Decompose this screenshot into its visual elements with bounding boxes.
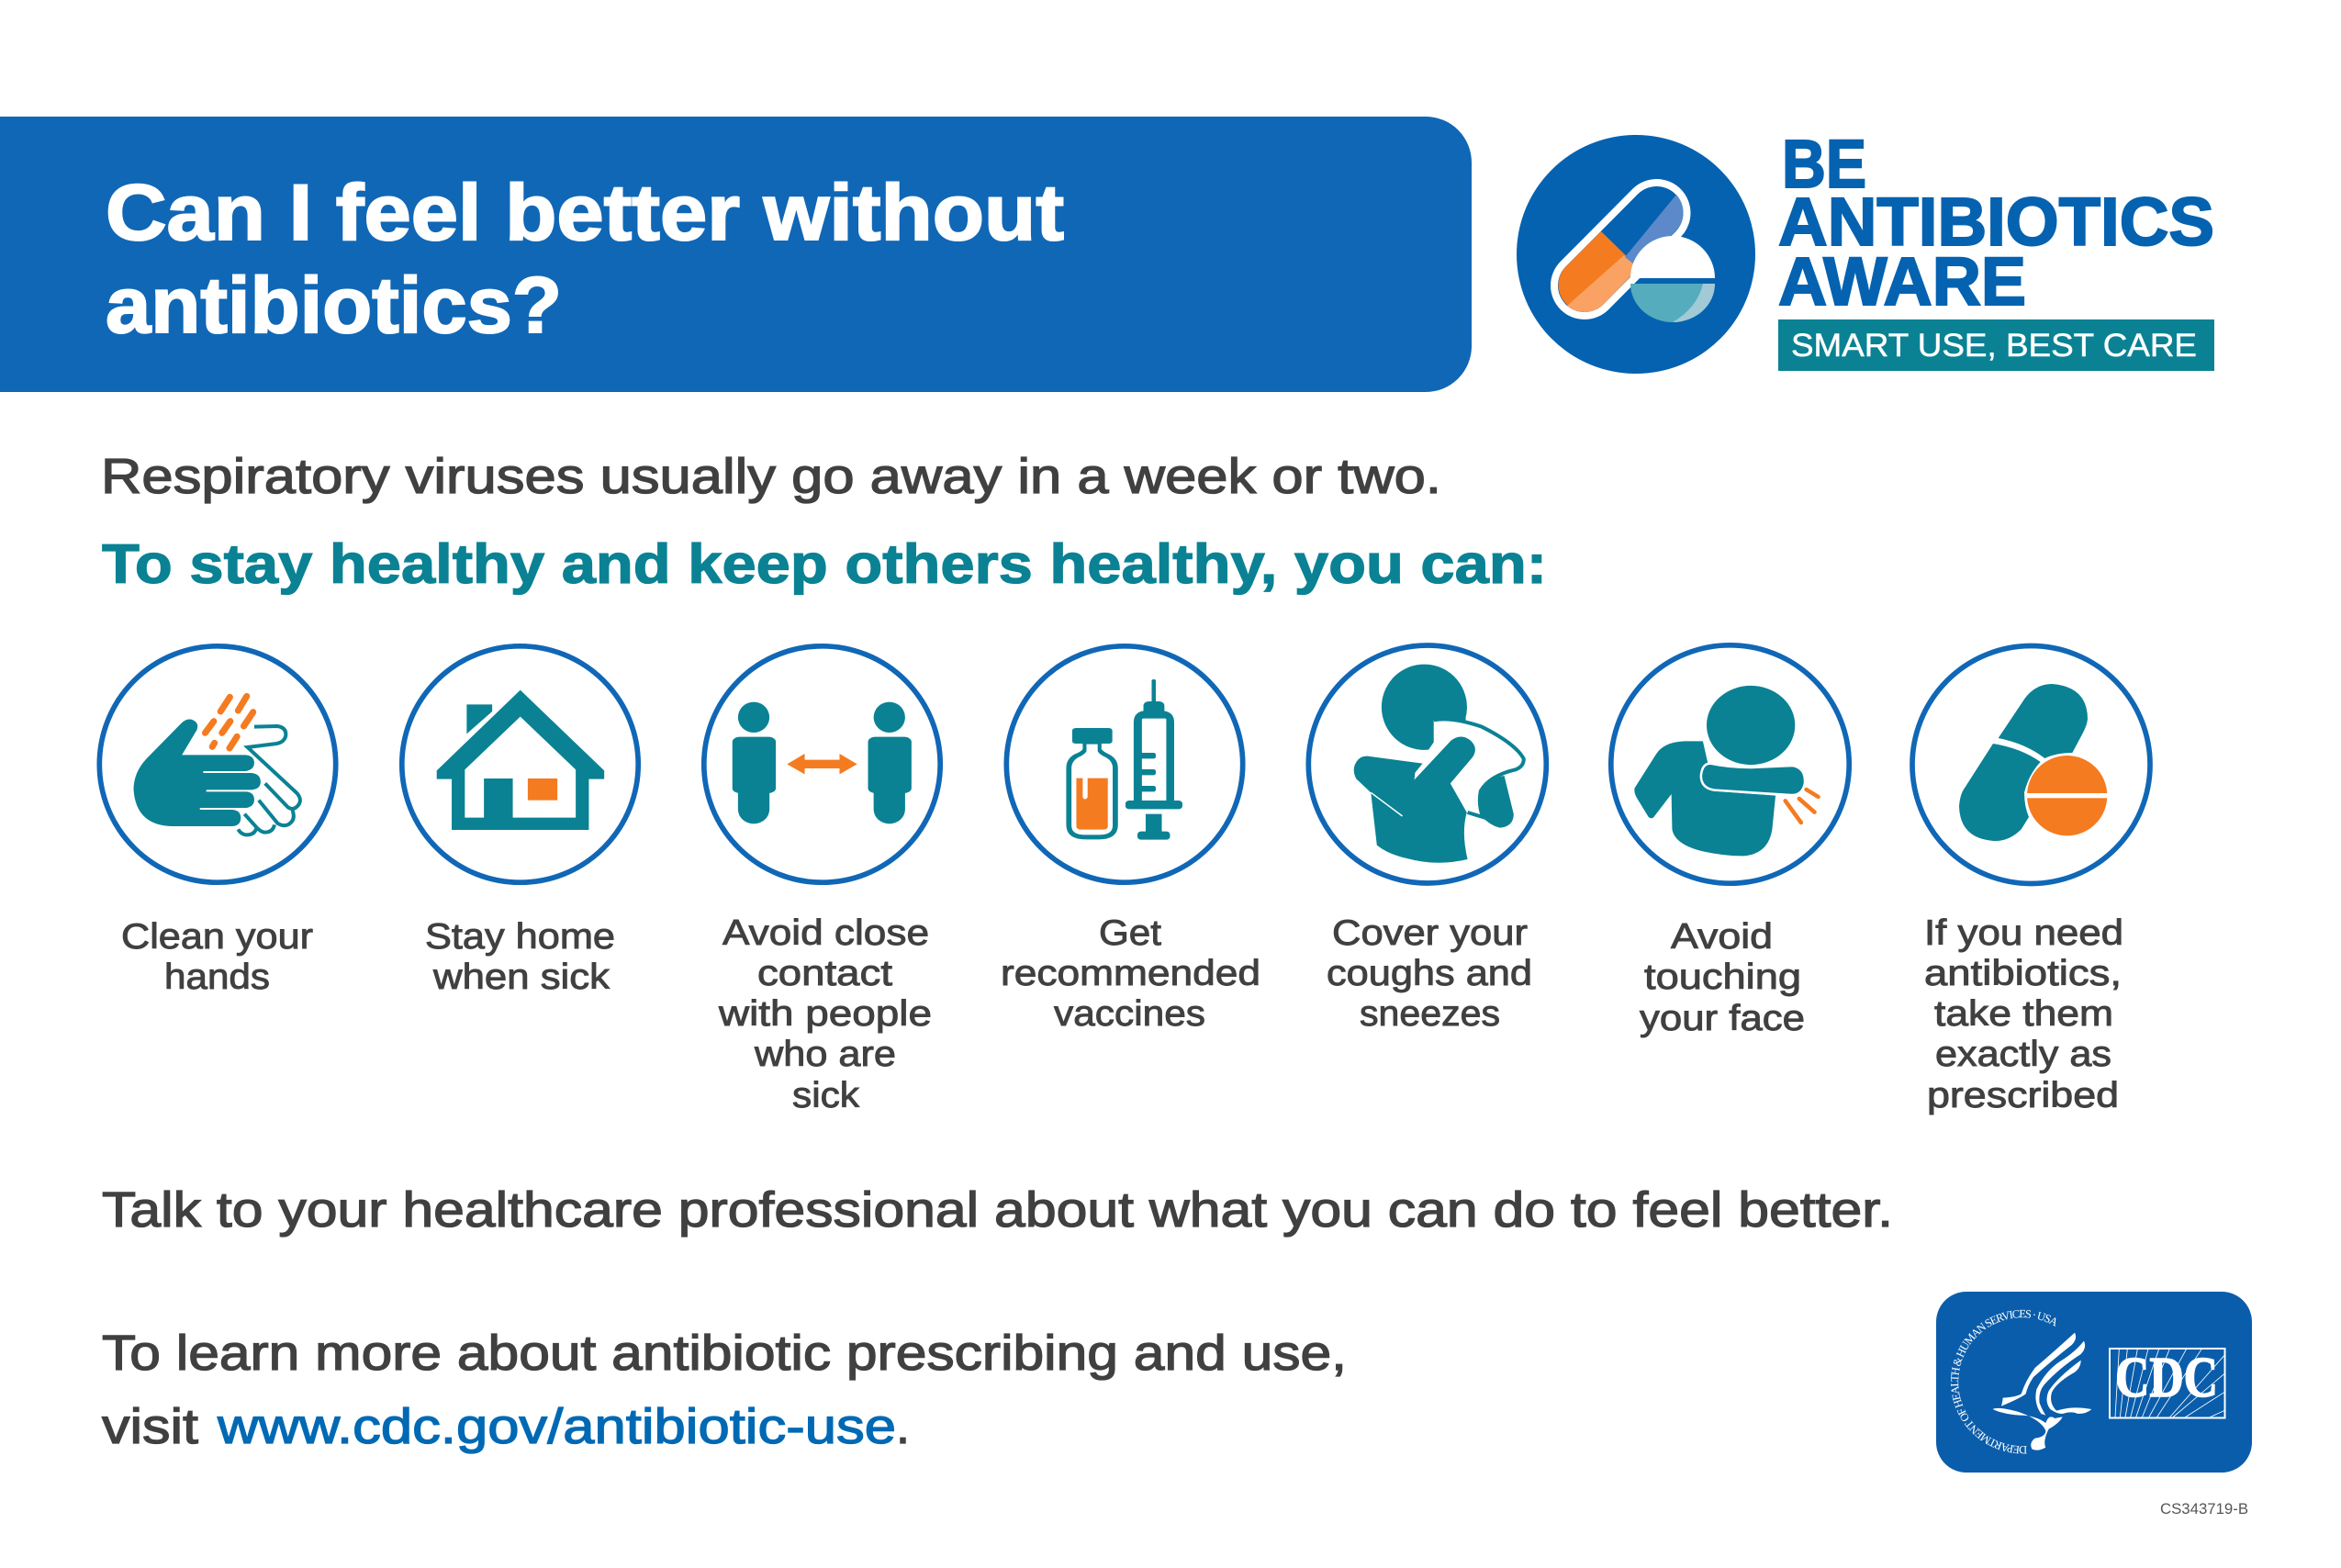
label: stay home: [425, 917, 615, 997]
label: vaccines: [1001, 913, 1260, 1034]
label: avoid touching face: Avoid: [1671, 917, 1773, 957]
label: clean your hands: hands: [164, 958, 270, 997]
icon: cover coughs and sneezes: [1308, 645, 1546, 883]
icon: take antibiotics as prescribed: [1912, 646, 2150, 883]
label: vaccines: recommended: [1001, 954, 1260, 993]
icon: avoid touching your face: [1611, 645, 1849, 883]
logo: Be Antibiotics Aware: [1517, 126, 2214, 374]
text: learn more with link: www.cdc.gov/antibiotic-use: [217, 1399, 896, 1454]
label: cover coughs: coughs and: [1327, 954, 1532, 993]
logo wordmark: BE: [1782, 126, 1866, 202]
label: antibiotics as prescribed: take them: [1934, 994, 2113, 1034]
label: antibiotics as prescribed: exactly as: [1935, 1035, 2111, 1074]
icon: avoid close contact: [704, 646, 940, 882]
label: avoid close contact: who are: [754, 1035, 896, 1074]
logo tagline: SMART USE, BEST CARE: [1791, 328, 2197, 364]
teal subheading: To stay healthy and keep others healthy, you can:: [102, 533, 1547, 595]
intro sentence: Respiratory viruses usually go away in a week or two.: [101, 449, 1441, 504]
label: antibiotics as prescribed: antibiotics,: [1924, 954, 2122, 993]
label: clean your hands: [121, 917, 313, 997]
label: cover coughs: sneezes: [1360, 994, 1500, 1034]
label: avoid close contact: [718, 913, 932, 1115]
label: stay home: when sick: [432, 958, 610, 997]
label: vaccines: Get: [1099, 913, 1161, 953]
label: avoid close contact: sick: [792, 1076, 860, 1115]
icon: vaccines: [1006, 646, 1243, 882]
label: clean your hands: Clean your: [121, 917, 313, 957]
label: cover coughs: [1327, 913, 1532, 1034]
label: cover coughs: Cover your: [1332, 913, 1528, 953]
label: antibiotics as prescribed: If you need: [1924, 913, 2123, 953]
logo tagline: [1778, 319, 2214, 371]
label: avoid close contact: contact: [757, 954, 892, 993]
label: avoid touching face: touching: [1644, 958, 1801, 997]
label: avoid touching face: [1640, 917, 1805, 1038]
HHS and CDC logo badge: [1936, 1292, 2252, 1473]
text: talk to your healthcare professional: Talk to your healthcare professional about what you can do to feel better.: [102, 1182, 1893, 1238]
title banner: Can I feel better without: [106, 169, 1064, 257]
icon: clean your hands: [99, 646, 336, 882]
logo wordmark: ANTIBIOTICS: [1778, 184, 2214, 260]
document code: CS343719-B: [2160, 1500, 2248, 1518]
label: avoid close contact: with people: [718, 994, 932, 1034]
label: antibiotics as prescribed: [1924, 913, 2123, 1115]
icon: stay home: [402, 646, 638, 882]
label: avoid close contact: Avoid close: [722, 913, 929, 953]
label: avoid touching face: your face: [1640, 999, 1805, 1038]
logo wordmark: AWARE: [1778, 243, 2026, 319]
logo wordmark: [1778, 126, 2214, 319]
title banner: antibiotics?: [106, 262, 562, 350]
text: learn more with link: visit: [102, 1399, 198, 1454]
icon: pill and tablet in circle: [1517, 135, 1755, 374]
text: learn more with link: To learn more about antibiotic prescribing and use,: [102, 1326, 1347, 1381]
HHS seal: DEPARTMENT OF HEALTH & HUMAN SERVICES · USA: [1950, 1309, 2056, 1454]
label: antibiotics as prescribed: prescribed: [1927, 1076, 2119, 1115]
text: learn more with link: [102, 1326, 1347, 1454]
label: vaccines: vaccines: [1054, 994, 1205, 1034]
label: stay home: Stay home: [425, 917, 615, 957]
title banner: [0, 117, 1472, 392]
text: learn more with link: .: [896, 1399, 910, 1454]
CDC logo: CDC: [2115, 1347, 2218, 1409]
